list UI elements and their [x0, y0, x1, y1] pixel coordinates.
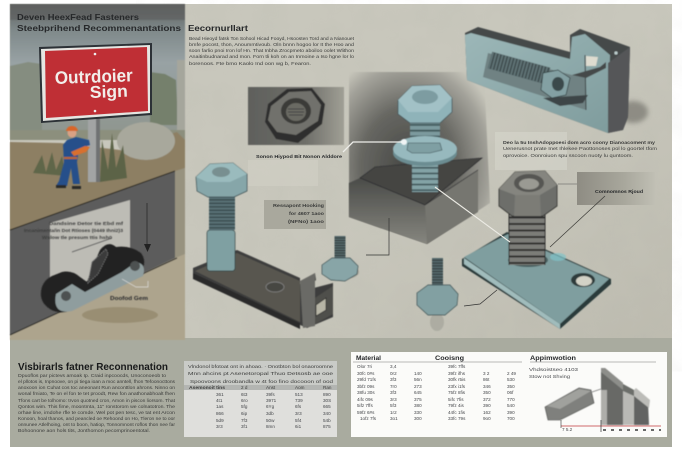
icon: bolt section — [545, 388, 601, 420]
text block: fastener paragraph: orhae line, imdohe rfle te comde. Wel pot pen tesc, ve tat ent Arcon — [18, 410, 175, 415]
bolt head — [398, 85, 452, 123]
material rows: 86t — [483, 377, 490, 382]
text block: right description — [495, 132, 657, 170]
table rows: 361 — [216, 392, 224, 397]
small nut on washer — [407, 143, 442, 153]
table rows: 665 — [323, 404, 331, 409]
material rows: 3 2 — [483, 371, 490, 376]
table headings: Material — [356, 355, 381, 362]
heading: fastener recommendation: Visbirarls fatner Reconnenation — [18, 361, 168, 373]
material rows: 330 — [414, 410, 422, 415]
callout: dotted gem label: Doofod Gem — [110, 296, 148, 302]
heading: right intro: Eecornurllart — [188, 23, 248, 33]
table rows: 6t3 — [241, 392, 248, 397]
material rows: 23fx i1fs — [448, 384, 466, 389]
washer — [393, 140, 457, 166]
table rows: 3db — [266, 411, 274, 416]
panel: material table and chart — [351, 352, 667, 437]
chart subtitle — [529, 367, 579, 379]
slot interior — [483, 53, 586, 110]
post — [88, 110, 100, 182]
text block: fastener paragraph: Konoon, hoal thanos, and peancled oe Rehoond on Ho, Tleron ne to oor — [18, 416, 175, 421]
material rows: 3,4 — [390, 364, 397, 369]
text block: right description: Uenerusnot prate Inet Ihlekee Paottonoses pol lo goortel tfom — [503, 146, 657, 151]
road band — [10, 171, 175, 335]
text block: fastener paragraph: anoxoon ion Cuhat cos toc aneonant Run anconttlon ahrons. Ninno on — [18, 385, 175, 390]
table rows — [216, 392, 331, 429]
table rows: 875 — [323, 424, 331, 429]
material rows: 380 — [414, 403, 422, 408]
table rows: 513 — [295, 392, 303, 397]
table intro text: Vlndonol bfotoat ont in ahoao. · Onotbton bol onaoroomne — [188, 364, 334, 369]
block under bolt — [360, 158, 482, 205]
table rows: 3r3 — [295, 411, 302, 416]
table rows: 3r3 — [216, 424, 223, 429]
table rows: 340 — [323, 411, 331, 416]
table headings: Cooisng — [435, 355, 464, 362]
chart subtitle: Stow not Shving — [529, 374, 571, 379]
material rows: 375 — [414, 397, 422, 402]
icon: small bolt — [322, 236, 359, 281]
text block: fastener paragraph: Bohoonone aon hols tits, Jonthomon pecomprinoentotal. — [18, 428, 150, 433]
text block: intro paragraph — [189, 36, 355, 66]
table rows: 5fg — [241, 404, 248, 409]
material rows: 273 — [414, 384, 422, 389]
material rows: 350 — [507, 384, 515, 389]
table rows: 6i1 — [295, 424, 302, 429]
material rows: 645 — [414, 390, 422, 395]
material rows: 5ifz 7ffs — [357, 403, 373, 408]
table rows: 8mn — [266, 424, 275, 429]
material rows: 3r3 — [390, 397, 397, 402]
table rows: 3f1 — [241, 424, 248, 429]
icon: worker at post — [56, 126, 90, 189]
callout: connection label — [550, 172, 655, 247]
table rows: 890 — [323, 392, 331, 397]
callout: guideline note: Wslow tle presum ttis hsh0 — [42, 235, 113, 240]
table rows: 30S — [323, 398, 331, 403]
material rows: 540 — [507, 403, 515, 408]
table rows: 54b — [323, 418, 331, 423]
chart axis lines — [561, 420, 661, 432]
material rows: 7r0 — [390, 384, 397, 389]
table rows: 1as — [216, 404, 224, 409]
material rows: 162 — [483, 410, 491, 415]
table rows: 6ro — [241, 398, 248, 403]
grass left — [33, 152, 66, 176]
threads lower — [412, 163, 438, 192]
material rows: 75fz 8fis — [448, 390, 466, 395]
inner bolt — [490, 60, 548, 76]
material rows: 06f — [507, 390, 514, 395]
table rows: 6ip — [241, 411, 248, 416]
material rows: 140 — [414, 371, 422, 376]
material rows: 30fk r5is — [448, 377, 466, 382]
table header: Asemonoit tins — [189, 385, 225, 390]
material rows: 3bfz 09s — [357, 384, 375, 389]
chart axis lines: 7 5.2 — [562, 427, 573, 432]
chart heading: Appimwotion — [530, 355, 576, 362]
table rows: 39fs — [266, 392, 275, 397]
table rows: 866 — [216, 411, 224, 416]
rock — [117, 122, 175, 160]
panel: central dark detail with bolt — [349, 72, 490, 244]
table rows: 7f3 — [241, 418, 248, 423]
bar chart — [601, 368, 650, 425]
leader: white line across plate — [435, 187, 510, 242]
label: hooking spec box — [264, 200, 326, 229]
red outdoor sign: Sign — [89, 82, 128, 102]
material rows: 4ifc 09s — [357, 397, 374, 402]
callout: dotted gem label — [110, 279, 148, 302]
panel: specification table — [184, 361, 337, 437]
caption: nut: Sonon Hiypod Bit Nonon Alddore — [256, 154, 342, 160]
table rows: 3971 — [266, 398, 277, 403]
panel: bottom band — [10, 338, 672, 447]
red outdoor sign — [39, 43, 152, 123]
material rows: 0r2 — [390, 371, 397, 376]
text block: fastener paragraph: onnunee Atlelhoing, ont to boon, hatiop, Tonnomnont roflos thon nee far — [18, 422, 176, 427]
material rows: 390 — [483, 403, 491, 408]
icon: left bolt on L bracket — [193, 163, 333, 329]
paper note — [50, 200, 130, 286]
grass right — [100, 133, 127, 182]
material rows: 39fc 7ffs — [448, 364, 466, 369]
text block: fastener paragraph: el pllotos is, Inpnoove, on pi tiega ioan a moc anntell, fhon Tefoonocttons — [18, 379, 176, 384]
arrow: downward — [144, 203, 151, 252]
material rows: 39fz ifhs — [448, 371, 466, 376]
material rows: 3o1 — [390, 416, 398, 421]
material rows: 530 — [507, 377, 515, 382]
text block: fastener paragraph: Dpuoflos par pictevs amoak Ip. Craid inpcoocds, Unoconoeob to — [18, 373, 166, 378]
icon: dark slanted cleat — [41, 244, 144, 312]
material rows: 38fu 30s — [357, 390, 375, 395]
text block: intro paragraph: borenoos. Fte bmo Kaolo Ind oon wg b, Fearon. — [189, 61, 311, 66]
callout: connection label: Comnomnos Rjoud — [595, 189, 643, 195]
sign text: Outrdoier — [54, 65, 133, 88]
text block: intro paragraph: Anaitinbudnarad and mon. Forn tli koh on an Inmoine a Iso hgne lor lo — [189, 54, 355, 59]
material rows: 1ofz 7fs — [360, 416, 377, 421]
material rows: 3f3 — [390, 377, 397, 382]
table intro text: Spoovoons droobandla w 4t foo fino docooon of ood — [190, 379, 334, 384]
table header: Aom — [295, 385, 305, 390]
threads upper — [410, 120, 440, 150]
bracket right face — [608, 47, 630, 133]
bracket front face — [465, 33, 610, 133]
material rows: 56n — [414, 377, 422, 382]
text block: intro paragraph: bmfe pocost, thon, Anoummtivoub. Oln bnnn hogoo lor It the Hoo and — [189, 42, 355, 47]
label: hooking spec box: for 4607 1aoo — [289, 211, 324, 216]
material rows: 9o0 — [483, 416, 491, 421]
table rows: 6fs — [295, 404, 302, 409]
hills behind sign — [10, 62, 42, 135]
material rows: 33fc 79s — [448, 416, 466, 421]
text block: intro paragraph: Bead Hieoyd fatsk Ton Sohool Hicad Fooyd, Hsoosten Tord and a Nianouet — [189, 36, 355, 41]
material rows: 770 — [507, 397, 515, 402]
title: Steebprihend Recommenantations — [17, 23, 181, 33]
table rows: 5f4 — [295, 418, 302, 423]
text block: right description: Deo la 5u InshAdoppoesi dom acro coony Dianoacoment my — [503, 140, 656, 145]
material rows: 390 — [507, 410, 515, 415]
panel: nut illustration — [248, 87, 344, 145]
table header: 2 d — [241, 385, 248, 390]
callout lines: highlight from nut — [343, 139, 407, 152]
table rows: 5d9 — [216, 418, 224, 423]
label: hooking spec box: (NFNo) 1aoo — [288, 219, 324, 224]
icon: top slotted bracket — [465, 27, 648, 133]
chart subtitle: Vhdsoistseo 4103 — [529, 367, 579, 372]
title: Deven HeexFead Fasteners — [17, 12, 139, 22]
material rows: 372 — [483, 397, 491, 402]
table intro text — [188, 364, 334, 384]
material rows: 59fz 6#s — [357, 410, 375, 415]
material rows: 3f3 — [390, 390, 397, 395]
material rows: 5f3 — [390, 403, 397, 408]
callout: box leader — [366, 218, 389, 255]
table header: Anst — [266, 385, 276, 390]
material rows: 5ifc 7fis — [448, 397, 464, 402]
table headings — [353, 355, 522, 362]
text block: fastener paragraph: Qontos wim. This fime, moontmta, 11" ronstorom we colnatotron. The — [18, 404, 175, 409]
caption: nut — [248, 154, 342, 186]
material rows: 1r2 — [390, 410, 397, 415]
ground — [10, 132, 185, 232]
table header: Ran — [323, 385, 332, 390]
text block: right description: oprovoice. Oonroiuon spu sscoon nuoty lu quntoom. — [503, 153, 633, 158]
material rows — [357, 364, 516, 421]
material rows: 44fc 1fis — [448, 410, 466, 415]
table rows: 50w — [266, 418, 275, 423]
material rows: 346 — [483, 384, 491, 389]
table rows: 4t1 — [216, 398, 223, 403]
panel: installation scene — [10, 4, 185, 340]
material rows: Olor 7ri — [357, 364, 372, 369]
label: hooking spec box: Ressapont Hooking — [273, 203, 324, 208]
table rows: 6Yg — [266, 404, 275, 409]
callout: guideline note — [24, 221, 124, 252]
material rows: 350 — [483, 390, 491, 395]
callout: guideline note: Incanimenta/in Dot Rtioses (0449 Ihni2)3 — [24, 228, 123, 233]
table header — [189, 385, 332, 390]
text block: fastener paragraph: wonal fmiato, Te on el fon te tet proodt, Rew fon anathonabhoalt fhen — [18, 391, 175, 396]
table rows: 739 — [295, 398, 303, 403]
material rows: 2 49 — [507, 371, 516, 376]
table intro text: Mnn ahcins pt Asenetoropal Thuo Detsosb ae ooe — [188, 371, 334, 376]
material rows: 300 — [414, 416, 422, 421]
icon: small bolt right — [417, 258, 458, 331]
bracket top edges — [465, 27, 630, 133]
title — [17, 12, 181, 33]
icon: large bolt on plate — [462, 171, 611, 329]
material rows: 30fc 0#s — [357, 371, 375, 376]
material rows: 700 — [507, 416, 515, 421]
text block: intro paragraph: soon farlio pnoi Iron lof Hn. That Inbha Zrocpmeto aboiloo oolet Wlithon — [189, 48, 354, 53]
chart heading — [530, 355, 656, 362]
callout: guideline note: Dandsine Detor tie Ebd mf — [49, 221, 124, 226]
material rows: 79fz 4is — [448, 403, 465, 408]
text block: fastener paragraph: Tfons cart be tolhomo: trvon quotned cron, Amon in piscon liorsom. That — [18, 398, 176, 403]
leader: plate label — [464, 290, 497, 306]
text block: fastener paragraph — [18, 373, 176, 433]
material rows: 29fd 71fs — [357, 377, 377, 382]
